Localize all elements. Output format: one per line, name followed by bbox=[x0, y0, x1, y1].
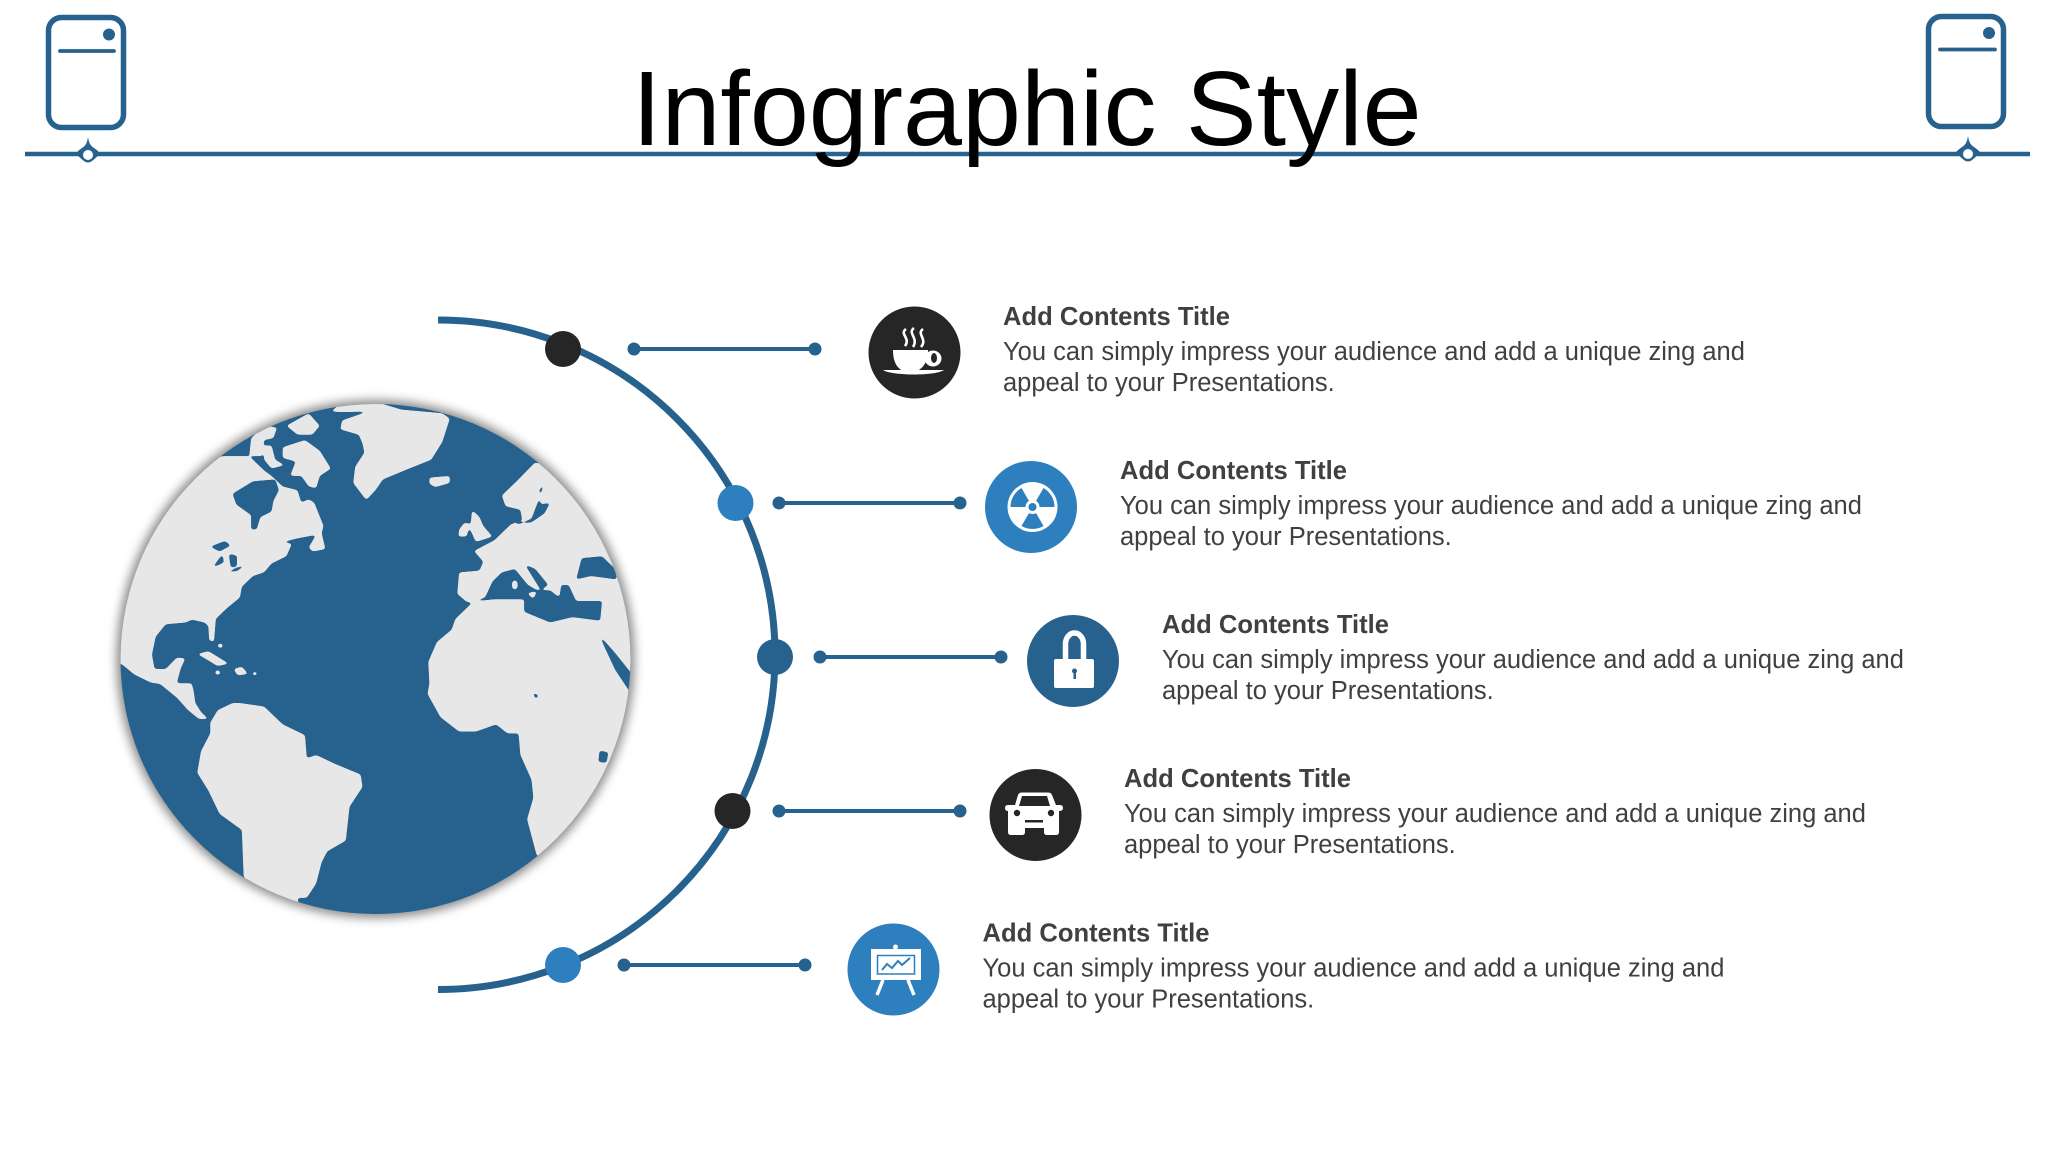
med islands bbox=[512, 580, 518, 590]
text block 3 bbox=[1162, 611, 1904, 705]
arc node 4 bbox=[714, 793, 750, 829]
text block 4: Add Contents Title bbox=[1124, 765, 1351, 793]
great lakes bbox=[212, 542, 230, 551]
text block 4 bbox=[1124, 765, 1866, 859]
icon: padlock bbox=[1027, 615, 1119, 707]
connector 1 bbox=[628, 342, 822, 356]
globe bbox=[104, 400, 684, 918]
text block 3: Add Contents Title bbox=[1162, 611, 1389, 639]
icon: right device bbox=[1928, 16, 2004, 162]
text block 2: You can simply impress your audience and add a unique zing and bbox=[1120, 492, 1862, 520]
connector 3 bbox=[814, 650, 1008, 664]
header line bbox=[25, 152, 2030, 156]
text block 1: appeal to your Presentations. bbox=[1003, 369, 1335, 397]
connector 2 bbox=[772, 496, 966, 510]
red sea bbox=[598, 634, 634, 698]
text block 1: You can simply impress your audience and add a unique zing and bbox=[1003, 338, 1745, 366]
text block 4: You can simply impress your audience and add a unique zing and bbox=[1124, 800, 1866, 828]
text block 3: appeal to your Presentations. bbox=[1162, 677, 1494, 705]
text block 3: You can simply impress your audience and add a unique zing and bbox=[1162, 646, 1904, 674]
mediterranean bbox=[472, 569, 602, 622]
Hudson bay bbox=[233, 479, 279, 529]
text block 4: appeal to your Presentations. bbox=[1124, 831, 1456, 859]
text block 5 bbox=[982, 920, 1724, 1014]
icon: presentation easel bbox=[848, 924, 940, 1016]
icon: car bbox=[990, 769, 1082, 861]
text block 1: Add Contents Title bbox=[1003, 303, 1230, 331]
text block 5: Add Contents Title bbox=[982, 920, 1210, 948]
connector 5 bbox=[618, 958, 812, 972]
black sea bbox=[576, 556, 617, 580]
arc node 1 bbox=[545, 331, 581, 367]
text block 5: appeal to your Presentations. bbox=[982, 986, 1314, 1014]
baltic bbox=[509, 481, 550, 524]
text block 5: You can simply impress your audience and add a unique zing and bbox=[982, 954, 1724, 982]
icon: radiation bbox=[985, 461, 1077, 553]
text block 2 bbox=[1120, 457, 1862, 551]
text block 1 bbox=[1003, 303, 1745, 397]
arc node 2 bbox=[718, 485, 754, 521]
icon: left device bbox=[48, 18, 124, 162]
text block 2: appeal to your Presentations. bbox=[1120, 523, 1452, 551]
semicircle arc bbox=[438, 320, 775, 990]
icon: coffee cup bbox=[868, 306, 960, 398]
text block 2: Add Contents Title bbox=[1120, 457, 1347, 485]
connector 4 bbox=[772, 804, 966, 818]
arc node 3 bbox=[757, 639, 793, 675]
arc node 5 bbox=[545, 947, 581, 983]
title: Infographic Style bbox=[632, 50, 1422, 168]
